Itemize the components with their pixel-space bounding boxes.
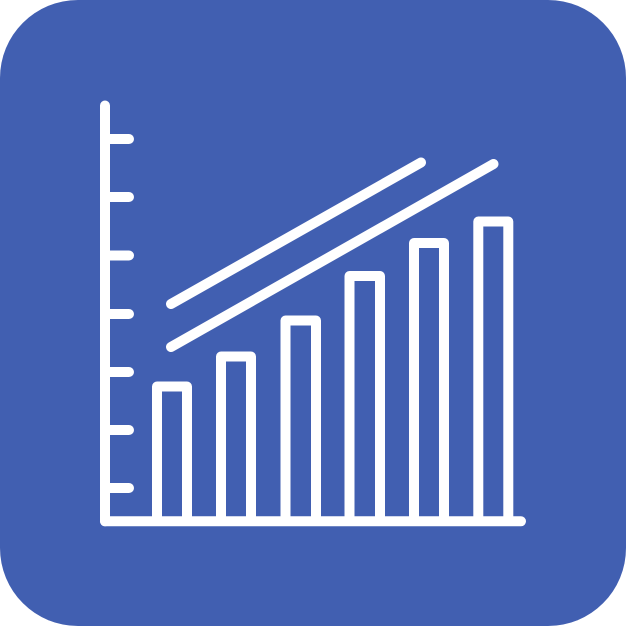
x axis: [105, 516, 521, 526]
y axis with ticks: [105, 106, 129, 521]
trend lines: [171, 162, 494, 347]
bars: [157, 222, 508, 521]
chart: axes and bars: [105, 106, 521, 521]
